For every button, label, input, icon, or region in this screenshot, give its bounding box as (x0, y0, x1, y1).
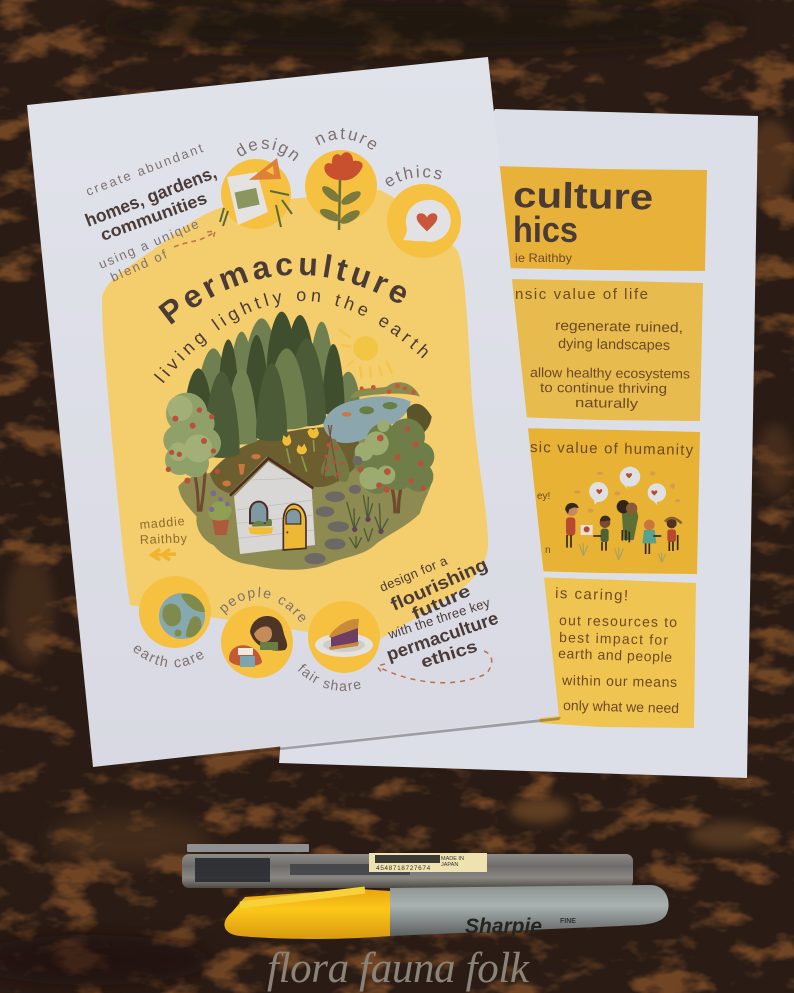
left apple tree (163, 393, 221, 512)
back panel: intrinsic value of humanity: n (545, 545, 551, 556)
top text: create abundant homes: homes, gardens, (82, 162, 219, 231)
circle: people care: people care (220, 587, 306, 622)
back panel: intrinsic value of life: naturally (575, 395, 639, 411)
right apple tree (353, 418, 434, 513)
barcode label (369, 853, 487, 872)
circle: design: design (237, 138, 298, 162)
stepping stones (304, 456, 362, 564)
circle: design (219, 138, 298, 229)
yellow blob panel (102, 190, 488, 642)
yellow Sharpie marker: Sharpie (465, 915, 542, 938)
back panel: intrinsic value of life: to continue thriving (540, 380, 667, 396)
ground (178, 430, 433, 570)
back panel: title: hics (513, 209, 578, 250)
top text: create abundant homes: create abundant (84, 140, 205, 199)
back panel: fair share is caring (530, 577, 696, 728)
circle: fair share (298, 601, 380, 692)
back panel: title: ie Raithby (515, 251, 572, 265)
top text: create abundant homes: blend of (108, 246, 169, 285)
circle: nature: nature (315, 128, 376, 150)
sun (340, 330, 392, 377)
circle: ethics (386, 165, 461, 258)
bottom-right text: design for a flourishing future: with the three key (385, 595, 492, 642)
circle: nature (305, 128, 377, 230)
back panel: fair share is caring: is caring! (555, 585, 628, 605)
back print: paper (279, 109, 758, 778)
front print: paper (27, 57, 561, 770)
bean trellis (321, 425, 349, 482)
circle: fair share: fair share (298, 664, 361, 692)
back panel: intrinsic value of life: dying landscapes (558, 335, 670, 353)
circle: ethics: ethics (386, 165, 442, 186)
yellow Sharpie marker: FINE (560, 918, 576, 925)
back panel: intrinsic value of life: allow healthy ecosystems (530, 365, 690, 381)
back panel: intrinsic value of humanity (515, 428, 700, 574)
circle: earth care: earth care (134, 646, 204, 668)
illustration: people with hearts (565, 467, 682, 563)
back panel: fair share is caring: best impact for (559, 629, 669, 648)
arrow: to fair share (377, 651, 492, 683)
back panel: title (495, 166, 707, 271)
back panel: intrinsic value of life (505, 279, 703, 421)
barcode label: MADE IN (441, 856, 464, 862)
arrow: to design (174, 231, 215, 247)
conifer forest (185, 312, 360, 458)
back panel: fair share is caring: only what we need (563, 697, 679, 716)
back panel: intrinsic value of humanity: sic value of humanity (530, 439, 694, 459)
bottom-right text: design for a flourishing future: future (409, 581, 473, 624)
top text: create abundant homes (82, 140, 219, 285)
top text: create abundant homes: using a unique (96, 216, 201, 272)
vegetables (347, 495, 388, 548)
bottom-right text: design for a flourishing future: flourishing (387, 554, 491, 615)
tulips (282, 427, 319, 472)
pond (323, 382, 432, 443)
central illustration: permaculture garden (163, 312, 434, 570)
back panel: intrinsic value of humanity: ey! (537, 491, 550, 502)
signature: Maddie Raithby (139, 514, 188, 560)
bottom-right text: design for a flourishing future: ethics (419, 637, 480, 672)
back panel: fair share is caring: within our means (561, 672, 677, 690)
circle: earth care (134, 576, 211, 668)
bottom-right text: design for a flourishing future: design for a (377, 553, 450, 595)
barcode label: JAPAN (441, 862, 458, 868)
back panel: intrinsic value of life: regenerate ruined, (555, 317, 683, 335)
cottage (230, 458, 315, 554)
yellow Sharpie marker (224, 885, 669, 939)
terracotta pots (208, 454, 261, 535)
signature: Maddie Raithby: maddie (139, 514, 185, 532)
back panel: fair share is caring: out resources to (559, 612, 677, 630)
title: Permaculture: Permaculture (158, 254, 406, 324)
clear gel pen (182, 844, 633, 888)
bottom-right text: design for a flourishing future: permaculture (384, 608, 501, 665)
back panel: title: culture (513, 174, 654, 217)
signature: Maddie Raithby: Raithby (140, 531, 188, 547)
back panel: intrinsic value of life: nsic value of life (515, 286, 648, 303)
watermark: flora fauna folk: flora fauna folk (267, 945, 530, 992)
bottom-right text: design for a flourishing future (377, 553, 501, 683)
top text: create abundant homes: communities (98, 189, 210, 245)
barcode label: 4548718727674 (376, 865, 431, 872)
subtitle: living lightly on the earth: living lightly on the earth (154, 291, 428, 384)
back panel: fair share is caring: earth and people (558, 645, 673, 665)
circle: people care (220, 587, 306, 678)
